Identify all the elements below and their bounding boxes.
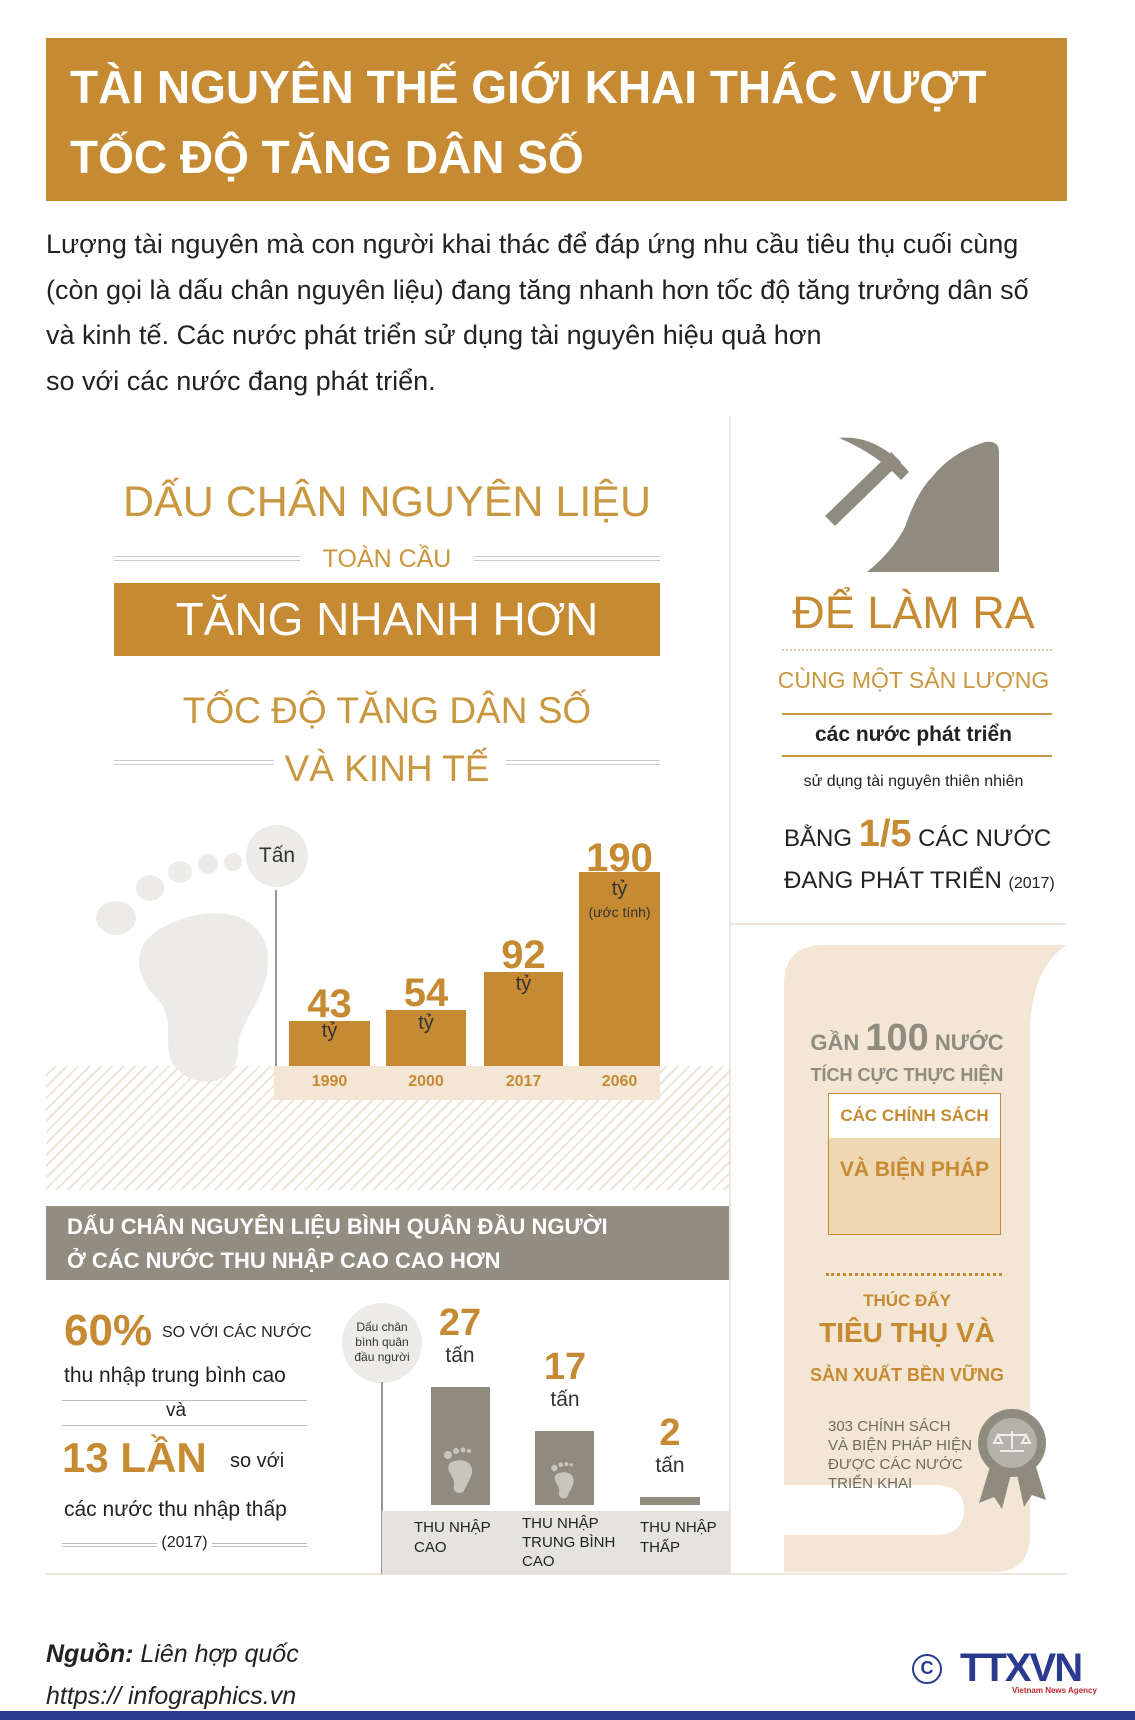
intro text: so với các nước đang phát triển. [46, 366, 436, 396]
title [46, 38, 1067, 201]
bar chart: material footprint: 190 [586, 836, 653, 880]
bar high income [431, 1387, 490, 1505]
panel: developed countries efficiency: ĐỂ LÀM RA [792, 587, 1035, 638]
unit label [342, 1303, 422, 1383]
bar chart: material footprint: 1990 [312, 1073, 347, 1090]
panel: developed countries efficiency: CÙNG MỘT SẢN LƯỢNG [778, 667, 1049, 693]
panel: developed countries efficiency [778, 587, 1055, 894]
panel: beige scroll policies: 303 CHÍNH SÁCH [828, 1418, 951, 1435]
intro text [46, 229, 1029, 396]
bar chart: material footprint: tỷ [418, 1012, 434, 1034]
bar chart: per capita: THU NHẬP [522, 1515, 599, 1532]
panel: comparison stats: so với [230, 1450, 284, 1472]
bar chart: per capita: THU NHẬP [640, 1519, 717, 1536]
panel: developed countries efficiency: BẰNG 1/5 CÁC NƯỚC [784, 813, 1051, 855]
logo: TTXVN: C [920, 1658, 934, 1678]
bar upper-middle [535, 1431, 594, 1505]
panel: developed countries efficiency: các nước phát triển [815, 723, 1012, 746]
bar chart: material footprint [246, 825, 660, 1100]
bar chart: material footprint: (ước tính) [588, 904, 651, 920]
icon: award badge [978, 1409, 1046, 1509]
logo: TTXVN [912, 1646, 1097, 1695]
panel: beige scroll policies: GẦN 100 NƯỚC [810, 1017, 1004, 1059]
banner: TĂNG NHANH HƠN [176, 593, 598, 645]
bar chart: per capita: CAO [522, 1553, 555, 1570]
bar chart: per capita: TRUNG BÌNH [522, 1534, 615, 1551]
bar chart: material footprint: 92 [501, 933, 546, 977]
text: VÀ KINH TẾ [285, 748, 489, 789]
bar chart: per capita: 2 [659, 1412, 681, 1454]
bar chart: material footprint: 54 [404, 971, 448, 1015]
unit label: Tấn [259, 844, 295, 867]
bar 2017 [484, 972, 563, 1066]
panel: comparison stats: (2017) [161, 1534, 208, 1551]
text: TỐC ĐỘ TĂNG DÂN SỐ [183, 690, 591, 731]
panel: comparison stats: và [166, 1400, 186, 1421]
panel: developed countries efficiency: ĐANG PHÁT TRIỂN (2017) [784, 867, 1055, 894]
bar chart: per capita [342, 1302, 729, 1574]
panel: comparison stats: các nước thu nhập thấp [64, 1498, 287, 1521]
title: TỐC ĐỘ TĂNG DÂN SỐ [70, 131, 584, 183]
bar chart: material footprint: 2017 [506, 1073, 541, 1090]
panel: beige scroll policies: THÚC ĐẨY [863, 1291, 951, 1310]
panel: beige scroll policies: TRIỂN KHAI [828, 1475, 912, 1492]
bar chart: per capita: THẤP [640, 1539, 680, 1556]
logo: TTXVN: Vietnam News Agency [1012, 1686, 1097, 1695]
panel: comparison stats [62, 1306, 312, 1551]
heading: DẤU CHÂN NGUYÊN LIỆU [123, 478, 651, 526]
panel: comparison stats: SO VỚI CÁC NƯỚC [162, 1324, 312, 1341]
bar chart: material footprint: 2000 [408, 1073, 444, 1090]
grey band heading: DẤU CHÂN NGUYÊN LIỆU BÌNH QUÂN ĐẦU NGƯỜI [67, 1214, 608, 1239]
bar chart: material footprint: tỷ [516, 973, 531, 995]
bar chart: material footprint: tỷ [612, 878, 627, 900]
bar chart: per capita: CAO [414, 1539, 447, 1556]
bar chart: per capita: 27 [439, 1302, 481, 1344]
logo: TTXVN: TTXVN [960, 1646, 1081, 1690]
banner [114, 583, 660, 656]
intro text: (còn gọi là dấu chân nguyên liệu) đang tăng nhanh hơn tốc độ tăng trưởng dân số [46, 274, 1029, 304]
panel: comparison stats: thu nhập trung bình cao [64, 1364, 286, 1387]
grey band heading: Ở CÁC NƯỚC THU NHẬP CAO CAO HƠN [67, 1248, 500, 1273]
panel: beige scroll policies: SẢN XUẤT BỀN VỮNG [810, 1365, 1004, 1385]
title: TÀI NGUYÊN THẾ GIỚI KHAI THÁC VƯỢT [70, 61, 987, 113]
panel: beige scroll policies: TIÊU THỤ VÀ [819, 1317, 995, 1348]
unit label: đầu người [354, 1350, 410, 1364]
footer url bar [0, 1711, 1135, 1720]
bar 1990 [289, 1021, 370, 1066]
grey band heading [46, 1206, 729, 1280]
bar chart: material footprint: 2060 [602, 1073, 637, 1090]
text [183, 690, 591, 789]
bar 2000 [386, 1010, 466, 1066]
panel: beige scroll policies: CÁC CHÍNH SÁCH [840, 1106, 989, 1125]
icon: big footprint [96, 853, 268, 1082]
bar chart: material footprint: tỷ [322, 1020, 337, 1042]
bar chart: per capita: tấn [655, 1454, 685, 1477]
bar chart: per capita: THU NHẬP [414, 1519, 491, 1536]
bar 2060 [579, 872, 660, 1066]
subheading: TOÀN CẦU [323, 545, 451, 573]
bar chart: per capita: 17 [544, 1346, 586, 1388]
panel: beige scroll policies: TÍCH CỰC THỰC HIỆN [811, 1065, 1003, 1085]
text: https:// infographics.vn [46, 1682, 296, 1710]
panel: beige scroll policies [784, 945, 1067, 1572]
panel: global footprint headline [114, 478, 660, 789]
panel: beige scroll policies: ĐƯỢC CÁC NƯỚC [828, 1456, 963, 1473]
bar chart: per capita: tấn [445, 1344, 475, 1367]
bar low income [640, 1497, 700, 1505]
unit label [246, 825, 308, 887]
unit label: bình quân [355, 1335, 409, 1349]
intro text: và kinh tế. Các nước phát triển sử dụng tài nguyên hiệu quả hơn [46, 320, 822, 350]
hatched ground [46, 1066, 729, 1190]
footer source: Nguồn: Liên hợp quốc [46, 1640, 299, 1668]
panel: developed countries efficiency: sử dụng tài nguyên thiên nhiên [804, 773, 1023, 790]
panel: beige scroll policies: VÀ BIỆN PHÁP HIỆN [828, 1437, 972, 1454]
panel: comparison stats: 13 LẦN [62, 1434, 207, 1481]
unit label: Dấu chân [356, 1320, 408, 1334]
icon: pickaxe and mountain [825, 438, 999, 572]
panel: beige scroll policies: VÀ BIỆN PHÁP [840, 1158, 989, 1181]
panel: comparison stats: 60% [64, 1306, 152, 1355]
bar chart: material footprint: 43 [307, 982, 352, 1026]
intro text: Lượng tài nguyên mà con người khai thác để đáp ứng nhu cầu tiêu thụ cuối cùng [46, 229, 1018, 259]
bar chart: per capita: tấn [550, 1388, 580, 1411]
